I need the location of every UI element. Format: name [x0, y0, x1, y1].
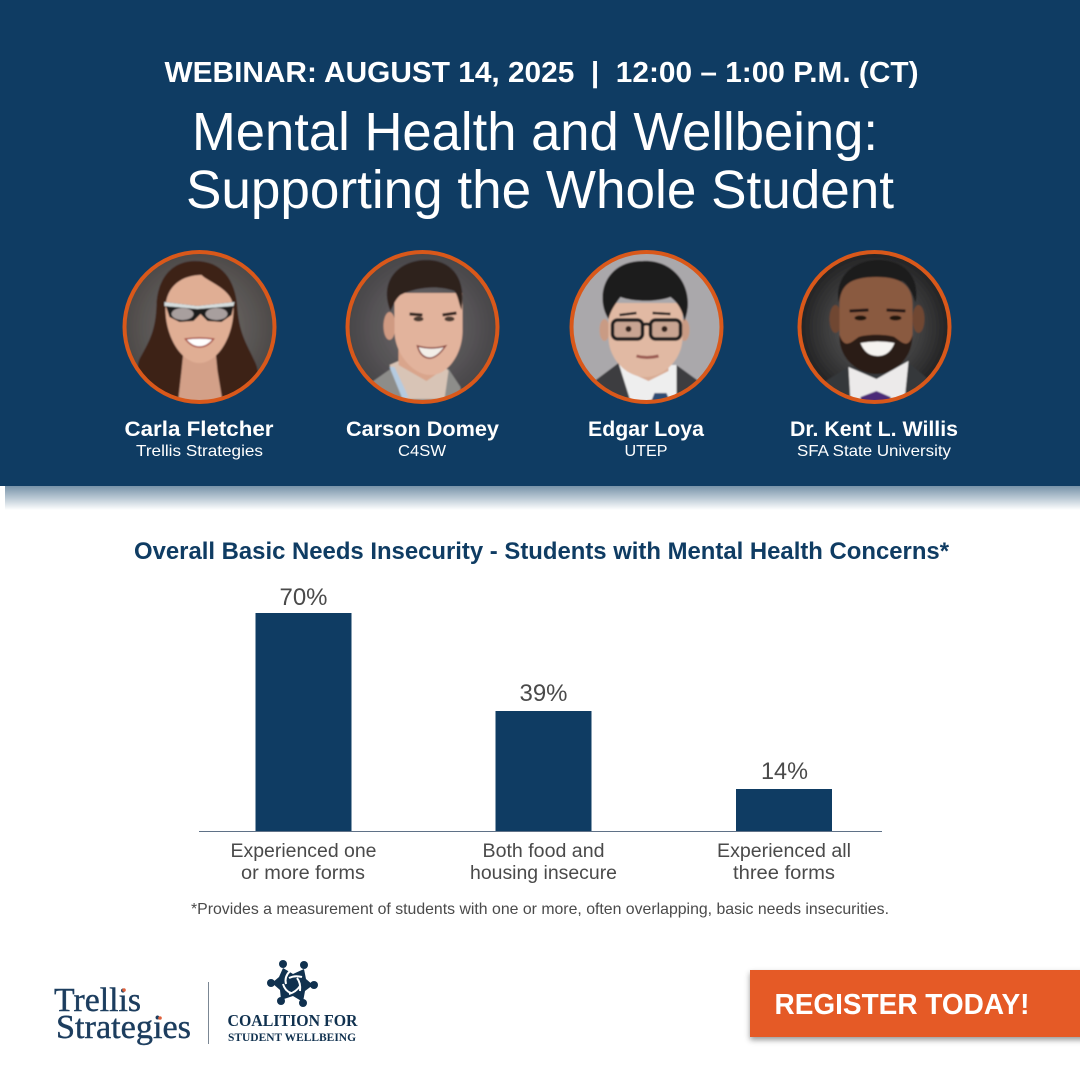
speaker labels: Edgar Loya: Edgar Loya	[588, 418, 704, 441]
speaker portrait: Carson Domey	[342, 247, 502, 407]
speaker labels: Dr. Kent L. Willis: Dr. Kent L. Willis	[790, 418, 958, 441]
logo divider	[208, 982, 209, 1044]
speaker portrait: Dr. Kent L. Willis	[794, 247, 954, 407]
logo: Coalition for Student Wellbeing: COALITION FOR	[228, 1011, 358, 1030]
speaker labels: Carson Domey	[346, 418, 499, 460]
speaker labels: Dr. Kent L. Willis	[790, 418, 958, 460]
speaker portrait: Carla Fletcher	[120, 247, 280, 407]
category label: one or more: or more forms	[241, 863, 365, 884]
title: Supporting the Whole Student	[186, 160, 894, 220]
bar: 70%: 70%	[280, 584, 328, 611]
category label: food and housing: Both food and	[482, 841, 604, 862]
speaker labels: Carson Domey: C4SW	[398, 443, 447, 460]
speaker labels: Carson Domey: Carson Domey	[346, 418, 499, 441]
header panel	[0, 0, 1080, 510]
category label: one or more	[230, 841, 376, 884]
category label: all three: Experienced all	[717, 841, 851, 862]
logo: Trellis Strategies	[54, 982, 191, 1046]
logo: Trellis Strategies: Trellis	[54, 982, 141, 1019]
speaker labels: Edgar Loya: UTEP	[624, 443, 668, 460]
speaker portrait: Edgar Loya	[566, 247, 726, 407]
register button	[750, 970, 1080, 1037]
register button: REGISTER TODAY!	[774, 989, 1030, 1021]
logo: Coalition for Student Wellbeing	[228, 960, 358, 1044]
category label: food and housing	[470, 841, 617, 884]
speaker labels: Dr. Kent L. Willis: SFA State University	[797, 443, 951, 460]
bar: 14%	[736, 758, 832, 831]
title	[186, 102, 894, 220]
chart axis	[199, 831, 882, 832]
speaker labels: Edgar Loya	[588, 418, 704, 460]
logo: Coalition for Student Wellbeing: STUDENT WELLBEING	[228, 1030, 356, 1044]
category label: food and housing: housing insecure	[470, 863, 617, 884]
bar: 14%: 14%	[761, 758, 808, 785]
footnote: *Provides a measurement of students with one or more, often overlapping, basic needs insecurities.	[191, 901, 889, 918]
category label: one or more: Experienced one	[230, 841, 376, 862]
chart title: Overall Basic Needs Insecurity - Students with Mental Health Concerns*	[134, 538, 950, 565]
webinar date line: WEBINAR: AUGUST 14, 2025 | 12:00 – 1:00 P.M. (CT)	[164, 57, 918, 89]
title: Mental Health and Wellbeing:	[192, 102, 878, 162]
speaker labels: Carla Fletcher	[124, 418, 274, 460]
category label: all three: three forms	[733, 863, 835, 884]
bar chart	[199, 584, 882, 884]
bar: 39%: 39%	[520, 680, 568, 707]
category label: all three	[717, 841, 851, 884]
speaker labels: Carla Fletcher: Trellis Strategies	[136, 443, 263, 460]
speaker labels: Carla Fletcher: Carla Fletcher	[124, 418, 274, 441]
icon: circle of people	[267, 960, 318, 1007]
bar: 70%	[256, 584, 352, 831]
logo: Trellis Strategies: Strategies	[56, 1009, 191, 1046]
bar: 39%	[496, 680, 592, 831]
